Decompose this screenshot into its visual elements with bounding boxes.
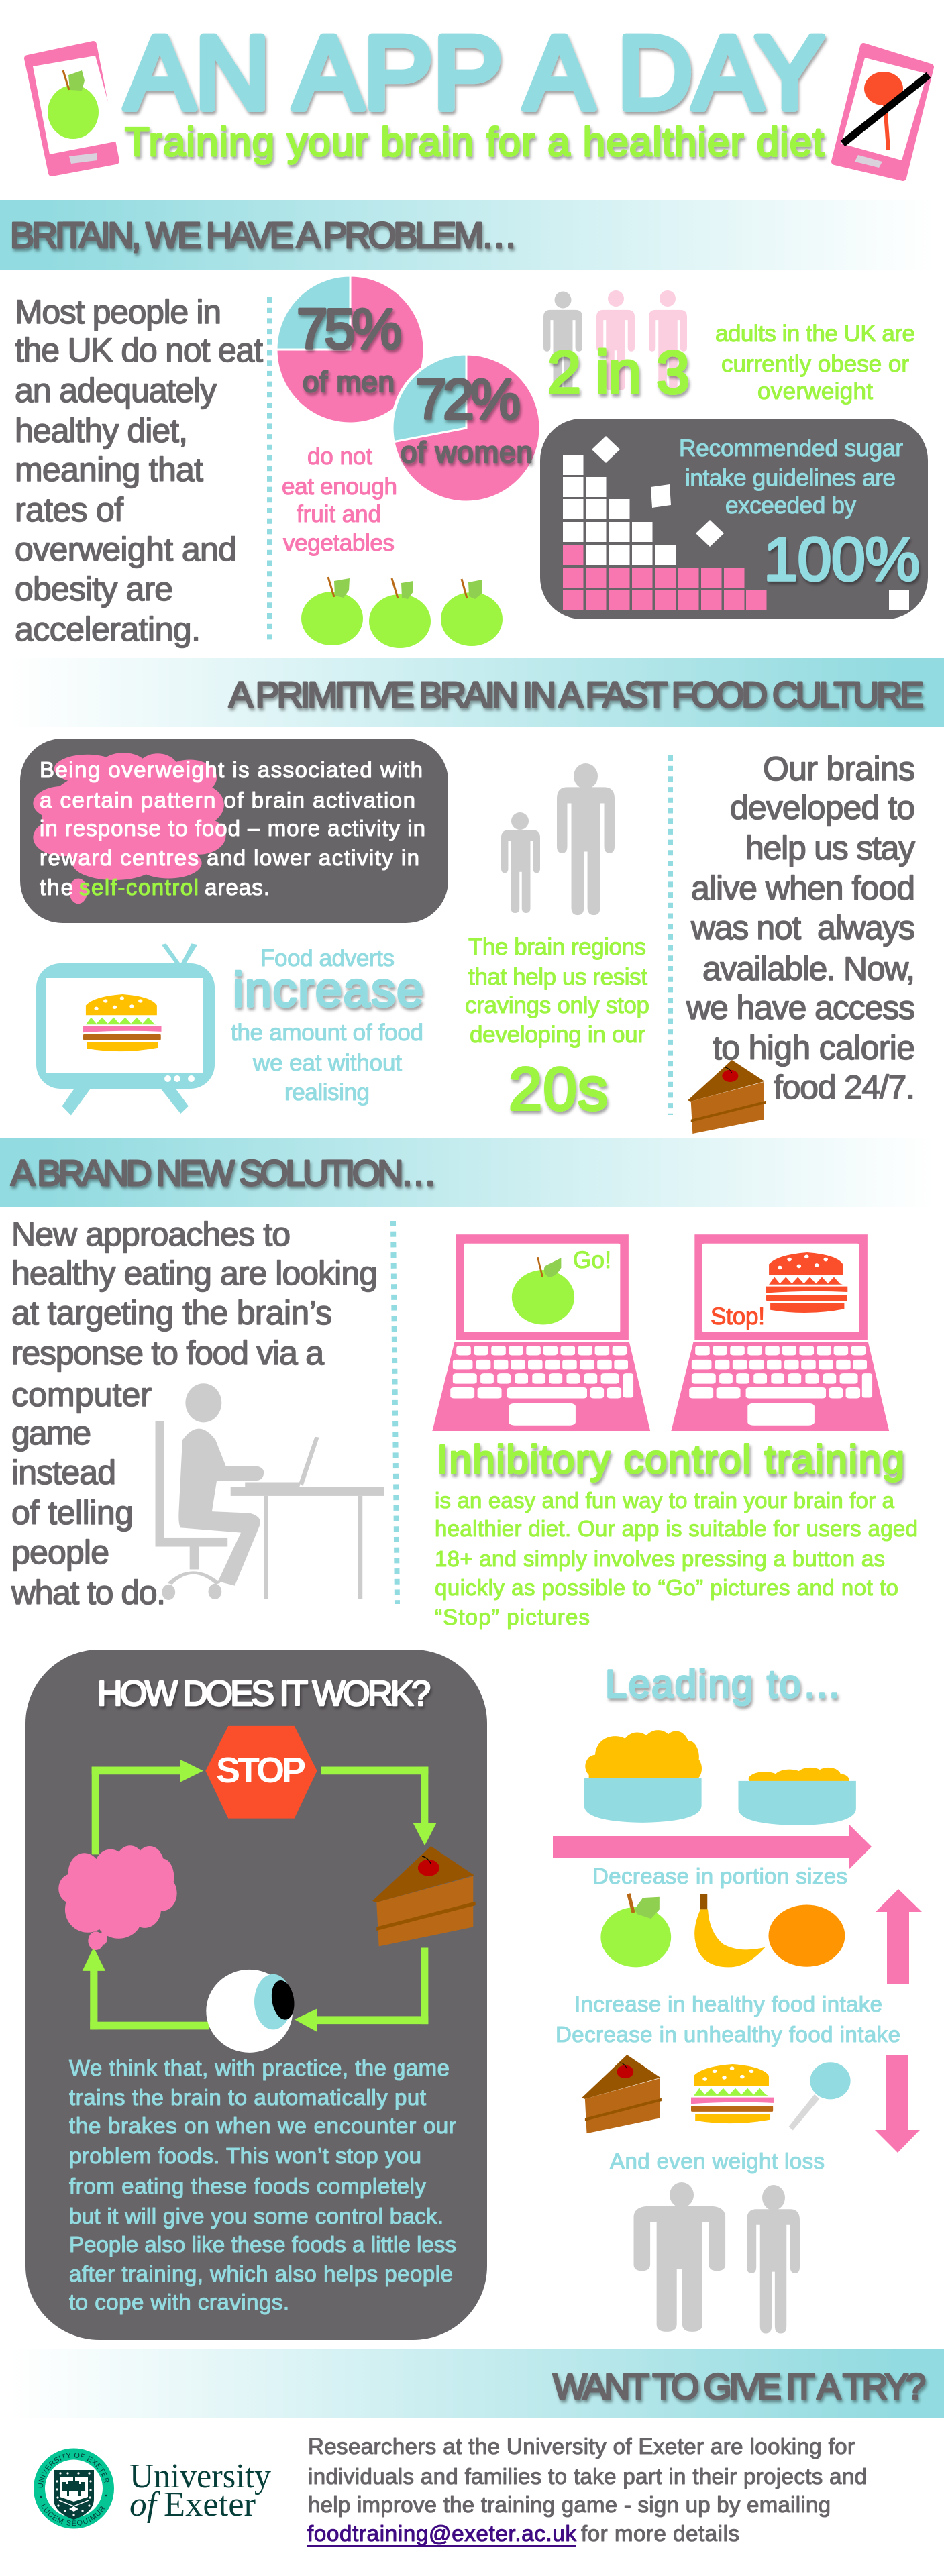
text block: food adverts increase: realising [284,1079,370,1106]
title: AN APP A DAY [125,15,825,131]
text block: new approaches: of telling [11,1494,134,1532]
text: and even weight loss: And even weight loss [610,2149,825,2174]
cycle diagram [58,1726,476,2053]
text block: new approaches: what to do. [11,1574,166,1611]
icon: cake, burger and lollipop [582,2055,851,2133]
icon: three apples [301,577,503,648]
text block: new approaches: New approaches to [11,1216,291,1253]
text block: we think that: to cope with cravings. [69,2290,289,2314]
icon: crest [34,2449,114,2529]
text: increase and decrease in food intake: Increase in healthy food intake [574,1992,882,2017]
chart: sugar cubes [563,436,909,610]
wordmark: University [129,2457,271,2496]
text block: being overweight: areas. [205,875,270,900]
icon: pink brain [33,753,226,904]
text block: new approaches: computer [11,1376,152,1413]
text block: our brains developed: alive when food [691,869,915,907]
text block: adults in the UK [715,321,915,405]
text block: do not eat enough fruit and vegetables: eat enough [282,474,397,500]
heading: how does it work: HOW DOES IT WORK? [97,1674,431,1713]
panel: how does it work [25,1650,487,2340]
section banner: Britain, we have a problem [0,200,944,270]
text block: our brains developed: we have access [686,989,915,1026]
text block: food adverts increase: the amount of food [231,1020,423,1046]
text block: being overweight: a certain pattern of brain activation [40,788,415,812]
text block: new approaches [11,1216,378,1611]
text block: we think that [69,2055,456,2314]
wordmark: Exeter [164,2485,256,2524]
text block: researchers sign up: Researchers at the University of Exeter are looking for [308,2434,855,2459]
text block: brain regions develop until 20s: 20s [509,1056,608,1123]
text block: inhibitory control description [435,1488,918,1629]
text block: new approaches: healthy eating are looking [11,1254,378,1292]
text block: being overweight [40,757,425,900]
text block: our brains developed: to high calorie [713,1029,915,1067]
text block: most people do not eat healthily: meaning that [15,451,203,488]
text block: our brains developed: was not always [690,909,915,947]
icon: laptop with go apple: Go! [573,1247,611,1273]
text block: do not eat enough fruit and vegetables [282,443,397,556]
section banner: a brand new solution [0,1138,944,1207]
section banner: primitive brain: A PRIMITIVE BRAIN IN A FAST FOOD CULTURE [229,675,924,715]
text block: researchers sign up: foodtraining@exeter.ac.uk [307,2521,577,2546]
text block: inhibitory control description: is an easy and fun way to train your brain for a [435,1488,895,1513]
stat: 100%: 100% [764,525,920,594]
text block: most people do not eat healthily: accelerating. [15,610,201,648]
text block: adults in the UK: overweight [757,378,873,405]
chart: pie 72% of women [390,352,542,504]
text block: brain regions develop until 20s: cravings only stop [465,992,649,1018]
stat: 2 in 3: 2 in 3 [547,339,690,407]
icon: cake [372,1846,476,1946]
arrow: eye to brain [83,1947,209,2029]
heading: leading to: Leading to… [605,1662,841,1706]
text: increase and decrease in food intake: Decrease in unhealthy food intake [556,2022,900,2047]
heading: inhibitory control training: Inhibitory control training [437,1437,904,1482]
text block: our brains developed: food 24/7. [774,1069,915,1106]
chart: pie 72% of women: 72% [415,368,521,431]
text block: we think that: but it will give you some control back. [69,2204,443,2229]
text block: researchers sign up: for more details [581,2521,739,2546]
text block: adults in the UK: adults in the UK are [715,321,915,347]
text: decrease in portion sizes: Decrease in portion sizes [592,1864,847,1888]
section banner: want to give it a try: WANT TO GIVE IT A TRY? [553,2367,926,2407]
text block: most people do not eat healthily: obesity are [15,570,173,608]
wordmark [129,2457,271,2524]
icon: person at a computer [156,1383,384,1600]
icon: crest: UNIVERSITY OF EXETER [38,2453,109,2487]
text block: most people do not eat healthily: healthy diet, [15,412,188,449]
text block: do not eat enough fruit and vegetables: vegetables [283,530,395,556]
text block: being overweight: the [40,875,73,900]
text block: our brains developed [686,750,915,1106]
text block: inhibitory control description: quickly as possible to “Go” pictures and not to [435,1575,898,1600]
icon: larger and smaller person [633,2182,800,2333]
text block: our brains developed: help us stay [745,829,915,867]
text block: researchers sign up: individuals and families to take part in their projects and [308,2464,867,2489]
text block: food adverts increase: Food adverts [260,945,395,971]
icon: cake slice [688,1060,766,1134]
text block: do not eat enough fruit and vegetables: fruit and [297,501,381,527]
text block: brain regions develop until 20s: developing in our [470,1022,645,1048]
text block: researchers sign up: help improve the training game - sign up by emailing [308,2492,831,2517]
text block: inhibitory control description: “Stop” pictures [435,1605,590,1629]
text block: being overweight: self-control [79,875,199,900]
text block: we think that: the brakes on when we encounter our [69,2113,456,2138]
subtitle: Training your brain for a healthier diet [125,119,824,164]
text block: food adverts increase: we eat without [252,1050,402,1076]
arrow: pink right arrow [553,1825,872,1869]
text block: brain regions develop until 20s: that help us resist [468,964,647,990]
icon: laptop with stop burger [671,1234,889,1431]
chart: pie 75% of men: of men [303,366,395,398]
text block: food adverts increase: increase [233,963,423,1017]
text block: new approaches: game [11,1414,91,1452]
text block: most people do not eat healthily: an adequately [15,372,217,409]
text block: recommended sugar: intake guidelines are [685,465,896,491]
text block: adults in the UK: currently obese or [721,351,909,377]
text block: most people do not eat healthily: overweight and [15,531,237,568]
text block: most people do not eat healthily: the UK do not eat [15,331,263,369]
text block: brain regions develop until 20s [465,934,649,1123]
text block: recommended sugar: Recommended sugar [679,435,903,462]
text: increase and decrease in food intake [556,1992,900,2047]
text block: we think that: problem foods. This won’t stop you [69,2143,421,2168]
text block: brain regions develop until 20s: The brain regions [468,934,646,960]
arrow: stop to cake [321,1767,436,1845]
panel: sugar guidelines [540,419,928,619]
text block: recommended sugar: exceeded by [725,492,856,519]
text block: we think that: after training, which also helps people [69,2261,453,2286]
icon: phone with apple [28,44,119,173]
text block: being overweight: reward centres and lower activity in [40,845,419,870]
icon: three people, 2 in 3 [543,290,687,390]
chart: pie 75% of men: 75% [297,297,402,360]
text block: researchers sign up [307,2434,867,2547]
chart: pie 72% of women: of women [401,436,533,469]
text block: we think that: from eating these foods completely [69,2174,427,2198]
text block: we think that: We think that, with practice, the game [69,2055,450,2080]
text block: new approaches: response to food via a [11,1334,324,1372]
text block: new approaches: instead [11,1454,116,1491]
text block: being overweight: Being overweight is associated with [40,757,423,782]
chart: pie 75% of men [276,276,424,423]
section banner: Britain, we have a problem: BRITAIN, WE HAVE A PROBLEM… [10,215,517,256]
icon: stop sign [205,1726,317,1819]
icon: television with burger [36,943,215,1116]
text block: we think that: trains the brain to automatically put [69,2085,426,2110]
arrow: brain to stop [92,1760,203,1854]
logo: University of Exeter [34,2449,271,2529]
icon: laptop with go apple [432,1234,650,1431]
text block: recommended sugar [679,435,903,519]
icon: crest: LUCEM SEQUIMUR [41,2504,105,2526]
icon: large and small bowls [584,1730,856,1825]
text block: inhibitory control description: healthier diet. Our app is suitable for users aged [435,1516,918,1541]
text block: our brains developed: available. Now, [702,950,915,987]
text block: new approaches: at targeting the brain’s [11,1294,332,1332]
icon: brain [58,1845,177,1950]
text block: most people do not eat healthily: Most people in [15,293,221,331]
arrow: pink down arrow [875,2055,920,2153]
text block: food adverts increase [231,945,423,1106]
arrow: pink up arrow [876,1889,922,1984]
wordmark: of [129,2485,160,2524]
icon: laptop with stop burger: Stop! [711,1303,765,1330]
section banner: want to give it a try [0,2349,944,2418]
icon: apple, banana and orange [600,1893,845,1967]
label: stop: STOP [216,1750,306,1790]
section banner: primitive brain [0,658,944,727]
text block: do not eat enough fruit and vegetables: do not [307,443,372,470]
icon: eye [206,1970,299,2053]
icon: phone with crossed-out lollipop [835,46,931,178]
panel: brain activation [20,739,448,923]
text block: our brains developed: Our brains [763,750,915,788]
text block: we think that: People also like these foods a little less [69,2232,456,2257]
text block: being overweight: in response to food – more activity in [40,816,425,841]
text block: most people do not eat healthily: rates of [15,491,123,529]
text block: new approaches: people [11,1534,109,1571]
arrow: cake to eye [295,1947,428,2032]
icon: adult and child [501,763,615,915]
text block: most people do not eat healthily [15,293,263,648]
text block: inhibitory control description: 18+ and simply involves pressing a button as [435,1546,885,1571]
section banner: a brand new solution: A BRAND NEW SOLUTION… [11,1153,437,1193]
text block: our brains developed: developed to [730,789,915,826]
